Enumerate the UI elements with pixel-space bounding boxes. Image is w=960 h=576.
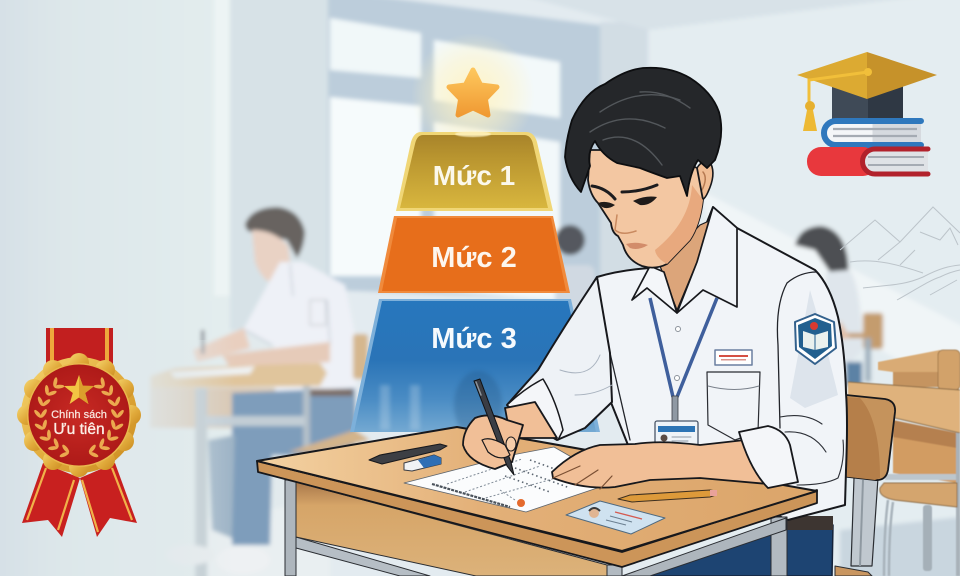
right student — [795, 226, 883, 386]
left branch — [33, 375, 72, 460]
face shadow — [655, 185, 703, 264]
level 1 — [396, 131, 553, 211]
badge: priority policy — [17, 328, 141, 537]
pyramid: priority levels — [350, 33, 600, 439]
fingers — [482, 439, 510, 458]
laurel — [33, 375, 125, 460]
mouth — [626, 243, 648, 249]
brows — [592, 185, 657, 199]
right arm — [552, 426, 798, 489]
gold seal — [17, 353, 141, 477]
icon: graduation cap on books — [797, 52, 937, 176]
star glow — [411, 33, 535, 157]
hair highlights — [590, 92, 690, 165]
trousers — [625, 525, 833, 576]
level 2 — [378, 216, 570, 293]
exam paper — [404, 447, 615, 512]
right cuff — [739, 426, 798, 488]
student ID card — [566, 501, 665, 534]
name tag — [715, 350, 752, 365]
back chair — [880, 483, 957, 507]
icon: star — [449, 70, 497, 115]
lanyard — [650, 298, 717, 426]
badge text: Ưu tiên — [53, 421, 105, 438]
sleeve shadow — [790, 290, 838, 408]
arms and hands — [463, 379, 798, 489]
level 1: Mức 1 — [433, 160, 515, 191]
tassel — [803, 68, 872, 131]
badge text: Chính sách — [51, 409, 107, 421]
red book — [807, 147, 928, 176]
cap base — [832, 86, 868, 120]
torso — [540, 207, 847, 520]
left fade overlay — [120, 340, 235, 576]
eyes — [598, 196, 657, 208]
apron — [296, 482, 607, 576]
buttons — [674, 326, 680, 380]
pen — [474, 379, 514, 475]
pocket — [707, 372, 760, 440]
collar — [632, 207, 737, 313]
ribbon top — [46, 328, 113, 368]
badge text — [51, 409, 107, 438]
desk legs — [285, 480, 787, 576]
hair — [565, 68, 721, 196]
sketch: mountains — [840, 207, 960, 300]
ear — [695, 162, 713, 201]
head — [565, 68, 721, 268]
student — [507, 68, 847, 576]
tabletop — [257, 427, 817, 551]
blue book — [824, 121, 921, 145]
pencil — [618, 490, 717, 502]
left arm and hand — [463, 379, 557, 475]
level 3: Mức 3 — [431, 323, 517, 355]
left sleeve — [507, 277, 612, 440]
desk pen — [369, 444, 447, 464]
school patch — [795, 314, 836, 364]
ID card — [655, 421, 698, 449]
back desks — [848, 350, 960, 576]
level 3 — [350, 299, 600, 439]
sleeve folds — [780, 416, 843, 485]
near desk — [848, 382, 960, 433]
eraser — [404, 455, 441, 471]
desk — [257, 427, 817, 576]
icon: gold star — [64, 375, 94, 404]
face — [588, 150, 703, 268]
mortarboard — [797, 52, 867, 99]
neck — [660, 217, 718, 310]
nose — [615, 215, 636, 233]
back student — [555, 225, 595, 335]
chair — [835, 395, 895, 576]
belt — [786, 516, 833, 530]
inner shirt — [650, 240, 713, 313]
tabletop edge — [257, 461, 817, 567]
red disc — [27, 363, 131, 467]
ribbon tails — [22, 463, 137, 537]
level 2: Mức 2 — [431, 242, 517, 274]
far desk — [878, 350, 940, 387]
right branch — [86, 375, 125, 460]
left student — [150, 207, 370, 576]
